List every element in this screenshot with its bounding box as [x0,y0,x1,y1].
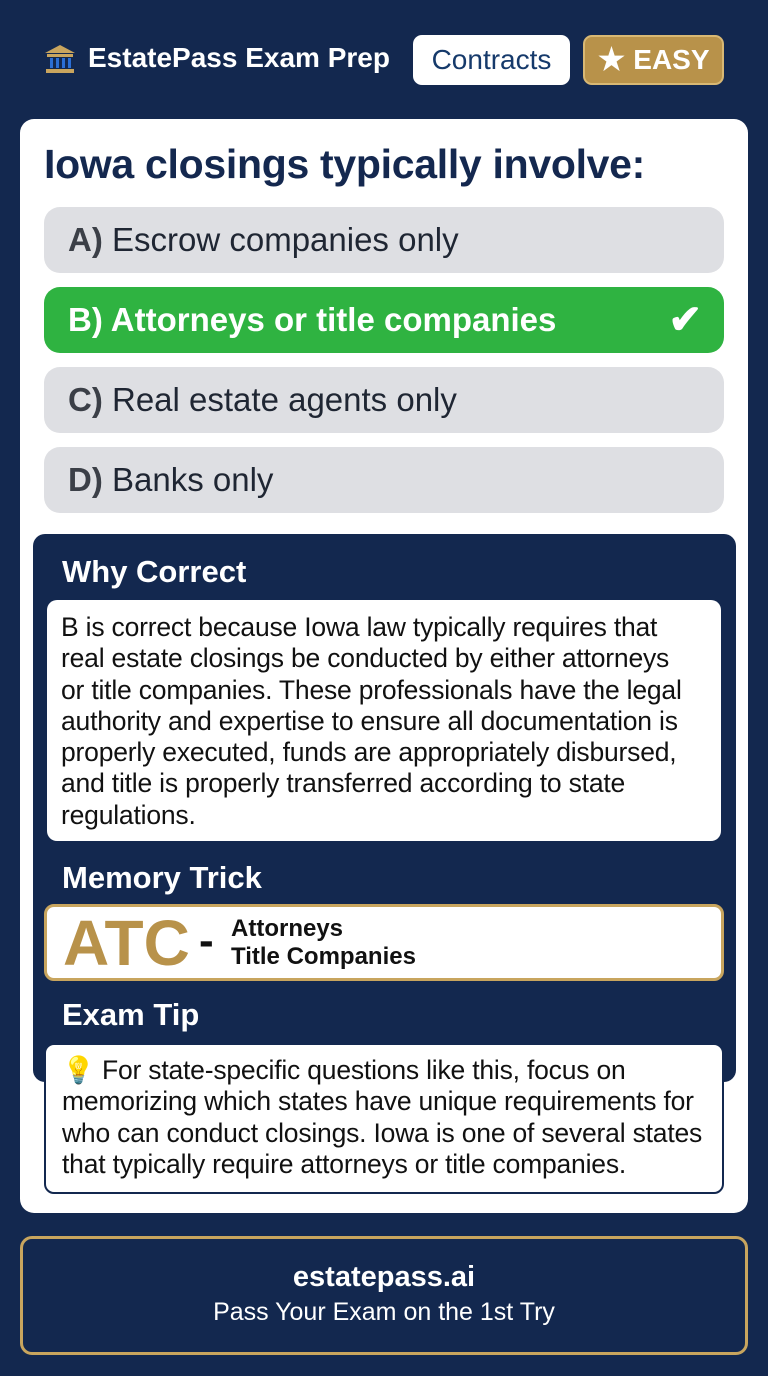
exam tip text: that typically require attorneys or title companies. [62,1149,626,1179]
tag: easy [583,35,724,85]
header [45,35,724,85]
option C: C) Real estate agents only [68,381,457,418]
option B correct: B) Attorneys or title companies [68,301,556,338]
why correct text: B is correct because Iowa law typically requires that [61,612,657,642]
exam tip text [44,1043,724,1194]
tag: easy: ★ EASY [597,44,710,75]
option B correct [44,287,724,353]
heading: why correct: Why Correct [62,554,246,589]
mnemonic box: Attorneys [231,915,343,942]
why correct text: regulations. [61,800,196,830]
why correct text: real estate closings be conducted by either attorneys [61,643,669,673]
option A [44,207,724,273]
question: Iowa closings typically involve: [44,141,645,187]
why correct text: authority and expertise to ensure all documentation is [61,706,678,736]
option D: D) Banks only [68,461,273,498]
heading: memory trick: Memory Trick [62,860,262,895]
exam tip text: memorizing which states have unique requirements for [62,1086,694,1116]
why correct text: properly executed, funds are appropriately disbursed, [61,737,676,767]
footer [20,1236,748,1355]
option D [44,447,724,513]
mnemonic box [44,904,724,981]
exam tip text: 💡 For state-specific questions like this, focus on [62,1055,626,1085]
footer: Pass Your Exam on the 1st Try [213,1298,555,1326]
exam tip text: who can conduct closings. Iowa is one of several states [62,1118,702,1148]
mnemonic box: Title Companies [231,943,416,970]
why correct text [47,600,721,841]
option C [44,367,724,433]
option A: A) Escrow companies only [68,221,459,258]
footer: estatepass.ai [293,1261,475,1293]
mnemonic box: - [199,916,214,965]
tag: Contracts: Contracts [432,44,551,75]
mnemonic box: ATC [63,907,190,979]
heading: exam tip: Exam Tip [62,997,199,1032]
why correct text: or title companies. These professionals have the legal [61,675,682,705]
tag: Contracts [413,35,570,85]
main card [20,119,748,1213]
brand title: EstatePass Exam Prep [88,42,390,73]
option B correct: ✔ [668,298,702,342]
explanation panel [33,534,736,1082]
icon: bank [45,45,75,73]
why correct text: and title is properly transferred according to state [61,768,625,798]
